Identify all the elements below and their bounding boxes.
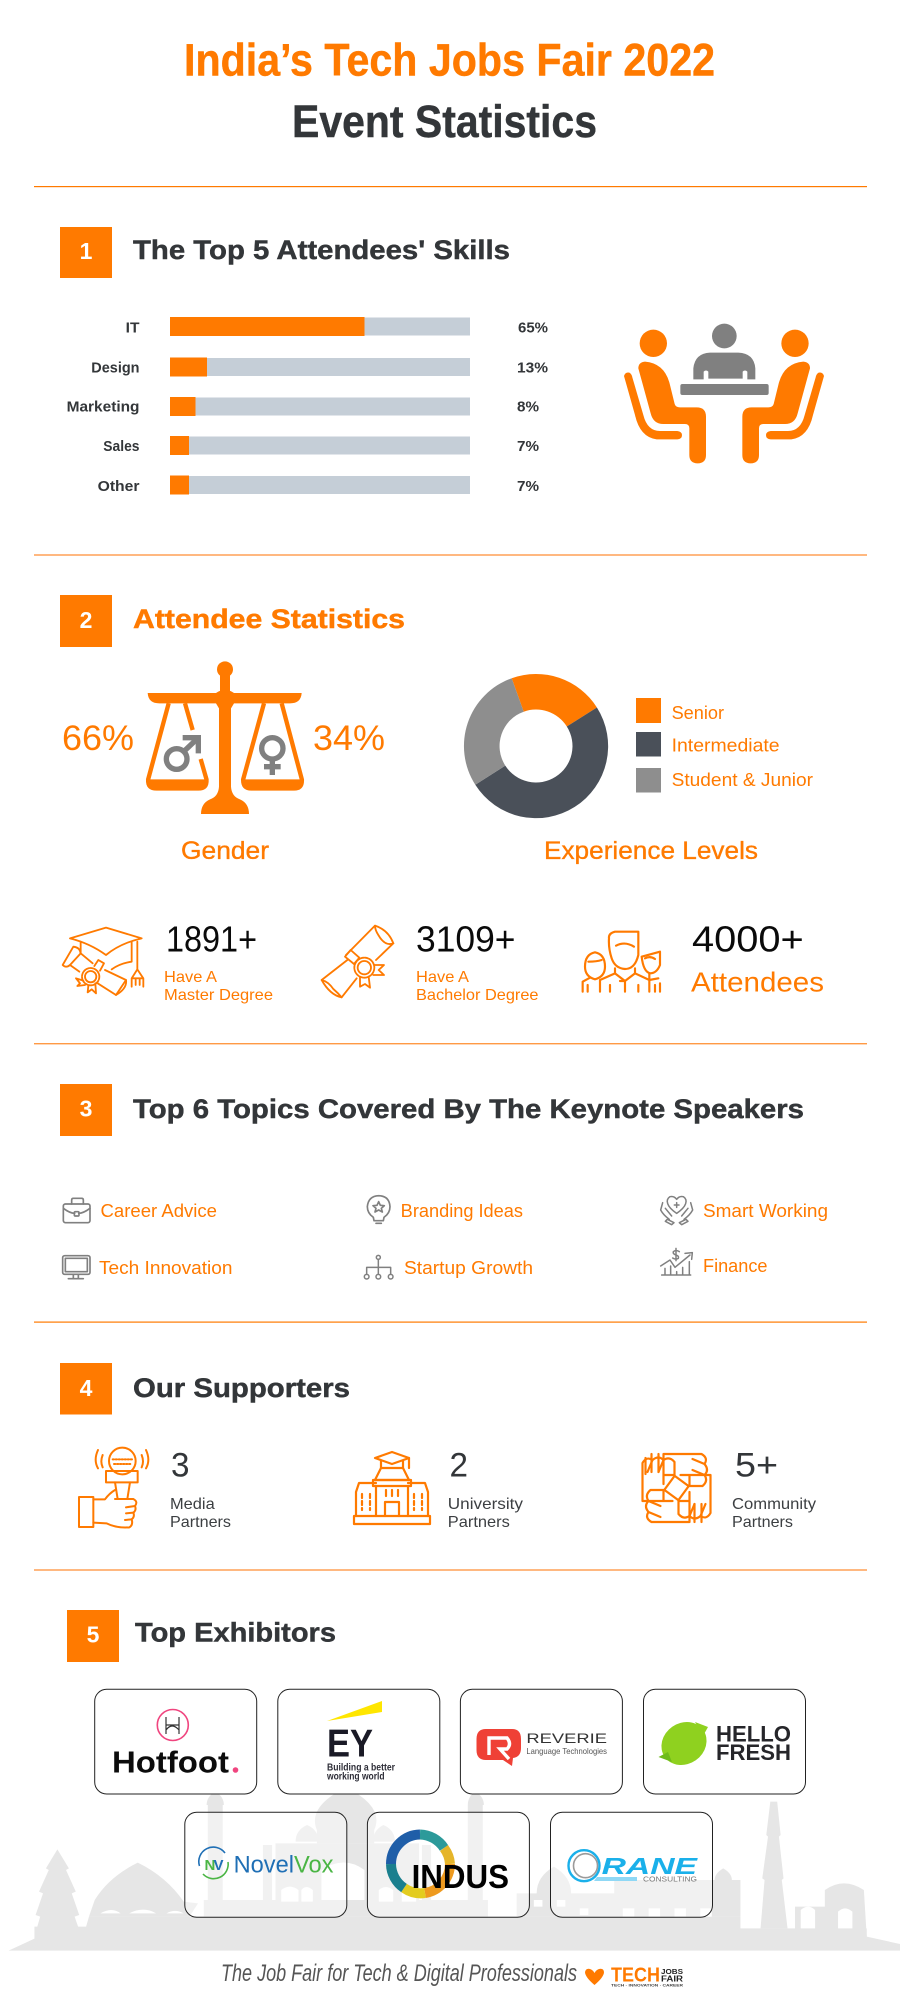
icon: interlocked hands	[642, 1454, 710, 1522]
supporter: university partners	[354, 1447, 523, 1531]
bar chart: skills	[67, 317, 548, 495]
bar chart: skills: 65%	[518, 320, 548, 336]
section 1 heading: The Top 5 Attendees' Skills	[133, 235, 510, 265]
icon: graduation cap and diploma	[63, 928, 143, 995]
icon: light bulb with star	[367, 1196, 390, 1223]
university label	[448, 1496, 523, 1531]
media label	[170, 1496, 231, 1531]
section 4 heading: Our Supporters	[133, 1373, 350, 1403]
section 3 heading: Top 6 Topics Covered By The Keynote Speakers	[133, 1094, 804, 1124]
logo card: Reverie: Language Technologies	[526, 1746, 607, 1756]
logo card: EY: working world	[326, 1772, 385, 1782]
logo card: EY	[278, 1689, 440, 1794]
logo card: Rane Consulting: RANE	[602, 1853, 698, 1879]
topic: startup growth	[364, 1255, 533, 1279]
attendees label: Attendees	[691, 967, 824, 998]
section 1 badge: 1	[80, 238, 93, 264]
media label: Media	[170, 1496, 215, 1513]
topic: startup growth: Startup Growth	[404, 1258, 533, 1278]
section 5 heading: Top Exhibitors	[135, 1618, 336, 1648]
bar chart: skills: Other	[98, 479, 140, 495]
gender label: Gender	[181, 837, 269, 865]
bar chart: skills: 13%	[517, 360, 548, 376]
logo card: Hotfoot	[95, 1689, 257, 1794]
legend: experience levels: Senior	[672, 703, 724, 723]
topic: finance: Finance	[703, 1256, 768, 1276]
logo card: EY: Building a better	[327, 1763, 395, 1774]
panel: supporters	[60, 1363, 816, 1531]
icon: university building	[354, 1452, 430, 1524]
icon: heart	[585, 1969, 604, 1985]
Tech Jobs Fair logo: TECH	[611, 1964, 660, 1986]
topic: branding ideas	[367, 1196, 523, 1223]
logo card: Indus	[367, 1812, 529, 1917]
icon: diploma scroll	[322, 926, 393, 997]
panel: keynote topics	[60, 1084, 828, 1279]
title	[184, 35, 715, 147]
section 3 badge: 3	[80, 1096, 92, 1122]
logo card: HelloFresh: FRESH	[716, 1740, 791, 1765]
legend: experience levels: Student & Junior	[672, 770, 813, 790]
icon: org network	[364, 1255, 393, 1279]
section 2 heading: Attendee Statistics	[133, 604, 405, 634]
section 5 badge: 5	[87, 1622, 100, 1648]
supporter: media partners	[79, 1447, 231, 1531]
Tech Jobs Fair logo: FAIR	[661, 1974, 683, 1984]
logo card: NovelVox: Novel	[234, 1852, 294, 1879]
logo card: NovelVox: V	[214, 1857, 224, 1874]
experience levels label: Experience Levels	[544, 837, 758, 865]
topic: career advice: Career Advice	[100, 1201, 217, 1221]
supporter: community partners	[642, 1447, 816, 1531]
icon: rising chart with dollar	[661, 1248, 692, 1275]
topic: smart working	[661, 1196, 828, 1225]
logo card: Reverie: REVERIE	[526, 1730, 607, 1746]
bar chart: skills: 7%	[517, 439, 539, 455]
topic: tech innovation: Tech Innovation	[99, 1258, 232, 1278]
bar chart: skills: IT	[126, 320, 140, 336]
city skyline illustration	[9, 1787, 900, 1951]
footer	[221, 1960, 683, 1988]
community label: Partners	[732, 1514, 793, 1531]
bar chart: skills: Sales	[103, 439, 140, 455]
attendees count: 4000+	[692, 919, 804, 960]
legend: experience levels	[636, 698, 813, 792]
logo card: NovelVox: N	[204, 1857, 215, 1874]
topic: tech innovation	[63, 1256, 233, 1279]
bachelor degree label: Have A	[416, 969, 469, 986]
bar chart: skills: Marketing	[67, 400, 140, 416]
panel: attendee statistics	[60, 595, 824, 1004]
bachelor degree label	[416, 969, 539, 1004]
icon: gender balance scale	[146, 661, 304, 814]
panel: top exhibitors	[67, 1610, 806, 1917]
logo card: Reverie	[460, 1689, 622, 1794]
university label: Partners	[448, 1514, 510, 1531]
university count: 2	[450, 1447, 468, 1485]
section 4 badge: 4	[80, 1375, 93, 1401]
icon: hand holding microphone	[79, 1448, 148, 1527]
icon: hands holding heart	[661, 1196, 693, 1225]
logo card: HelloFresh	[644, 1689, 806, 1794]
icon: monitor	[63, 1256, 90, 1279]
logo card: Hotfoot: Hotfoot	[112, 1745, 229, 1780]
legend: experience levels: Intermediate	[672, 736, 780, 756]
section 3 badge	[60, 1084, 112, 1136]
master degree label: Have A	[164, 969, 217, 986]
donut chart: experience levels	[464, 674, 608, 818]
section 5 badge	[67, 1610, 119, 1662]
community label	[732, 1496, 816, 1531]
topic: branding ideas: Branding Ideas	[401, 1201, 523, 1221]
master degree count: 1891+	[166, 919, 257, 960]
Tech Jobs Fair logo: JOBS	[661, 1969, 683, 1976]
icon: group of people	[583, 932, 660, 992]
logo card: NovelVox: Vox	[294, 1852, 334, 1879]
university label: University	[448, 1496, 523, 1513]
logo card: NovelVox	[185, 1812, 347, 1917]
section 4 badge	[60, 1363, 112, 1414]
bar chart: skills: Design	[91, 360, 140, 376]
community count: 5+	[735, 1447, 778, 1485]
topic: career advice	[63, 1198, 217, 1223]
footer tagline: The Job Fair for Tech & Digital Professionals	[221, 1960, 577, 1987]
title: Event Statistics	[292, 96, 597, 147]
topic: smart working: Smart Working	[703, 1201, 828, 1221]
section 2 badge	[60, 595, 112, 647]
gender percent female: 34%	[313, 719, 385, 758]
icon: briefcase	[63, 1198, 90, 1223]
stat: master degree	[63, 919, 273, 1004]
section 1 badge	[60, 227, 112, 278]
logo card: HelloFresh: HELLO	[716, 1722, 791, 1747]
Tech Jobs Fair logo: TECH · INNOVATION · CAREER	[611, 1984, 683, 1988]
stat: attendees	[583, 919, 824, 998]
gender percent male: 66%	[62, 719, 134, 758]
topic: finance	[661, 1248, 768, 1276]
section 2 badge: 2	[80, 607, 92, 633]
stat: bachelor degree	[322, 919, 539, 1004]
master degree label: Master Degree	[164, 987, 273, 1004]
bar chart: skills: 8%	[517, 400, 539, 416]
logo card: EY: EY	[327, 1723, 373, 1766]
logo card: Rane Consulting: CONSULTING	[643, 1874, 697, 1884]
media count: 3	[171, 1447, 190, 1485]
community label: Community	[732, 1496, 816, 1513]
title: India’s Tech Jobs Fair 2022	[184, 35, 715, 86]
panel: top skills	[60, 227, 824, 495]
bar chart: skills: 7%	[517, 479, 539, 495]
icon: meeting at table	[624, 324, 824, 463]
media label: Partners	[170, 1514, 231, 1531]
master degree label	[164, 969, 273, 1004]
logo card: Rane Consulting	[550, 1812, 712, 1917]
logo card: Indus: INDUS	[412, 1858, 509, 1895]
bachelor degree count: 3109+	[416, 919, 516, 960]
bachelor degree label: Bachelor Degree	[416, 987, 539, 1004]
